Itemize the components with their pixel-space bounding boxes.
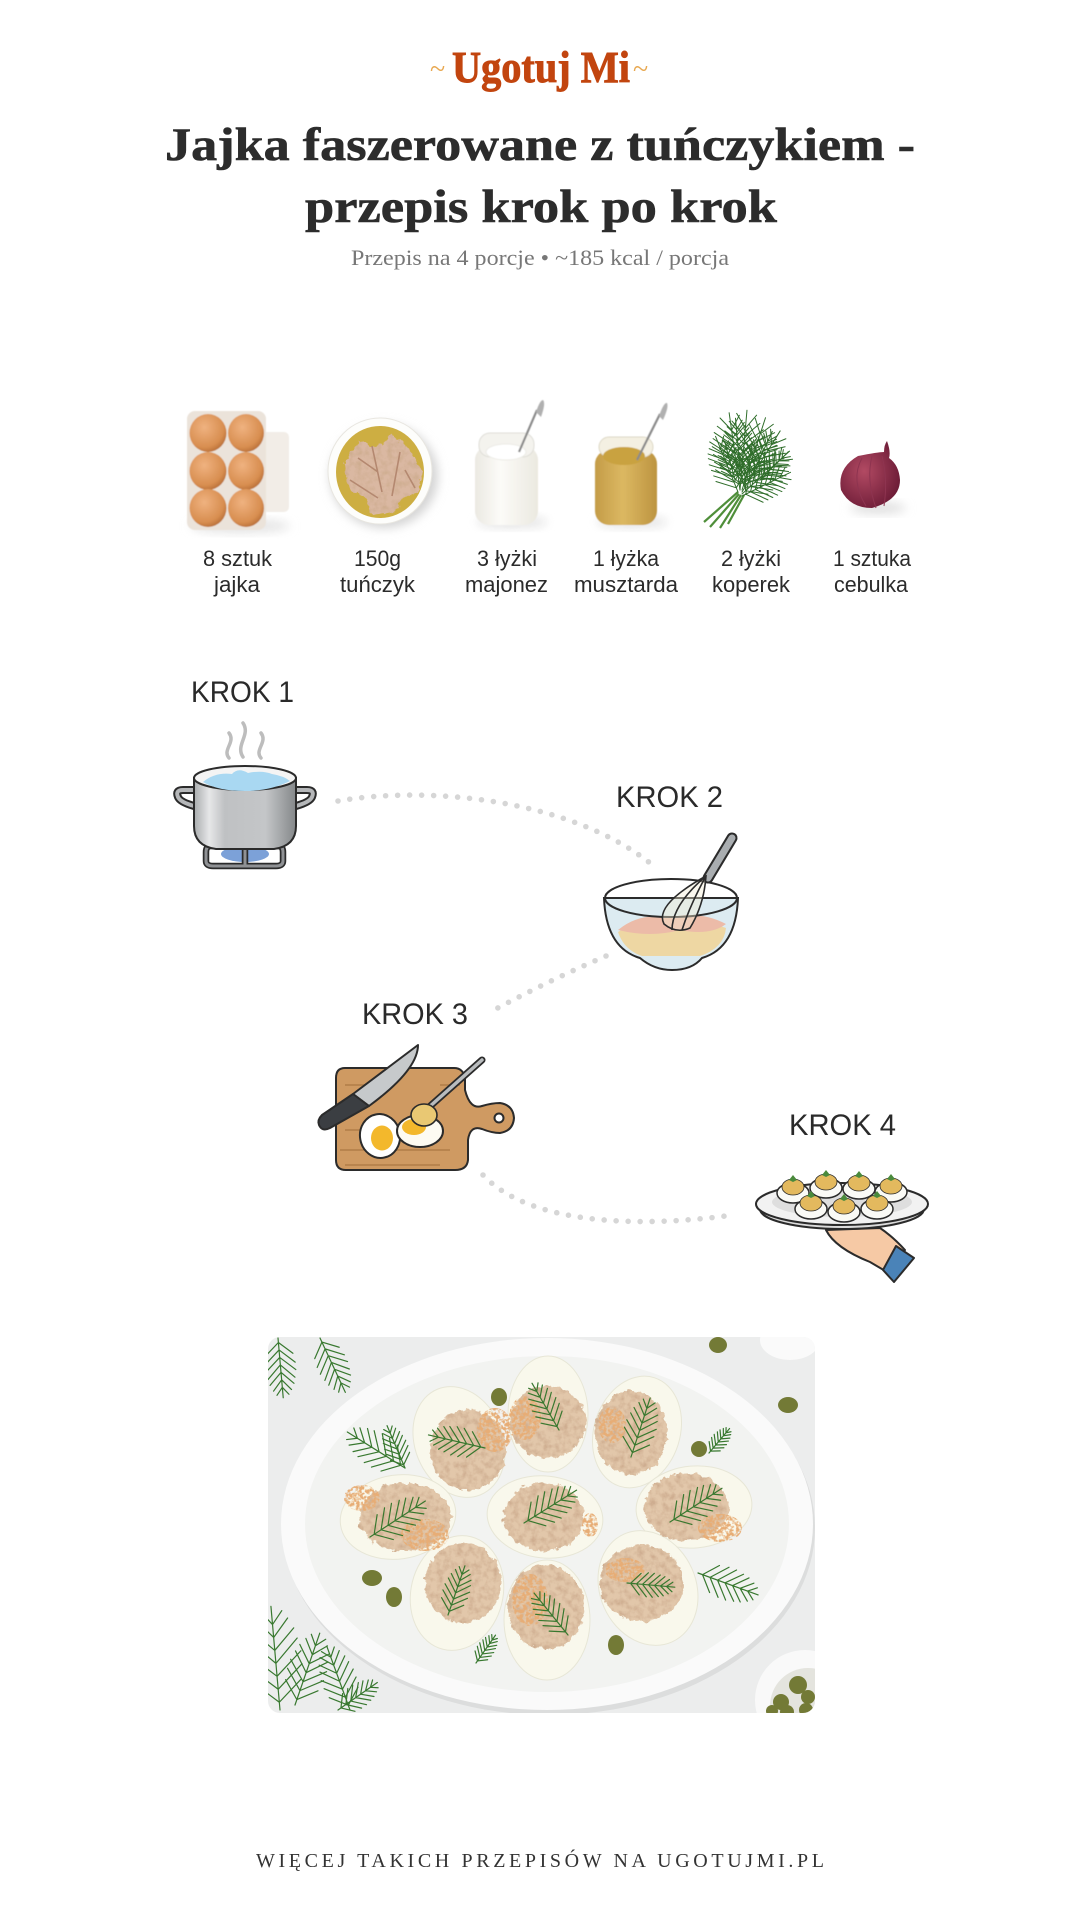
ingredient labels: 150g: [354, 546, 401, 571]
ingredient labels: 3 łyżki: [477, 546, 537, 571]
arrow: dotted path step 1 to 2: [338, 795, 650, 863]
title: przepis krok po krok: [305, 181, 778, 233]
icon: red onion: [840, 441, 906, 514]
title: Jajka faszerowane z tuńczykiem -: [165, 119, 915, 171]
ingredient labels: cebulka: [834, 572, 909, 597]
icon: mustard jar: [595, 403, 668, 528]
logo: ~: [633, 54, 648, 85]
ingredient labels: 1 łyżka: [593, 546, 660, 571]
icon: egg carton: [187, 411, 290, 533]
plate: [281, 1338, 815, 1715]
ingredient labels: 8 sztuk: [203, 546, 273, 571]
ingredient labels: musztarda: [574, 572, 679, 597]
ingredient labels: koperek: [712, 572, 791, 597]
step 2 heading: KROK 2: [616, 781, 723, 814]
ingredient labels: tuńczyk: [340, 572, 416, 597]
deviled eggs whites: [335, 1356, 755, 1680]
icon: mayonnaise jar: [475, 400, 548, 528]
step 4 heading: KROK 4: [789, 1109, 896, 1142]
ingredient labels: 1 sztuka: [833, 546, 912, 571]
ingredient labels: 2 łyżki: [721, 546, 781, 571]
icon: hand holding plate of eggs: [756, 1170, 928, 1282]
ingredient labels: jajka: [213, 572, 261, 597]
icon: cutting board with knife and egg: [318, 1045, 514, 1170]
ingredient labels: majonez: [465, 572, 548, 597]
tuna filling: [359, 1386, 728, 1649]
paprika accents: [344, 1396, 742, 1626]
subtitle: Przepis na 4 porcje • ~185 kcal / porcja: [351, 245, 729, 270]
icon: boiling pot: [177, 723, 313, 866]
step 3 heading: KROK 3: [362, 998, 468, 1031]
logo: ~: [430, 54, 445, 85]
dill garnish: [245, 1332, 764, 1720]
title: [165, 119, 915, 233]
logo: Ugotuj Mi: [452, 43, 630, 92]
icon: mixing bowl with whisk: [604, 838, 738, 970]
step 1 heading: KROK 1: [191, 676, 294, 709]
corner bowls and capers: [362, 1337, 815, 1713]
icon: dill bunch: [700, 408, 801, 528]
arrow: dotted path step 2 to 3: [494, 956, 606, 1010]
footer: WIĘCEJ TAKICH PRZEPISÓW NA UGOTUJMI.PL: [256, 1848, 824, 1872]
ingredient labels: [203, 546, 912, 597]
photo: finished stuffed eggs on plate: [268, 1337, 815, 1713]
panel: ingredients: [187, 400, 912, 597]
icon: tuna bowl: [328, 418, 438, 528]
arrow: dotted path step 3 to 4: [483, 1175, 733, 1222]
